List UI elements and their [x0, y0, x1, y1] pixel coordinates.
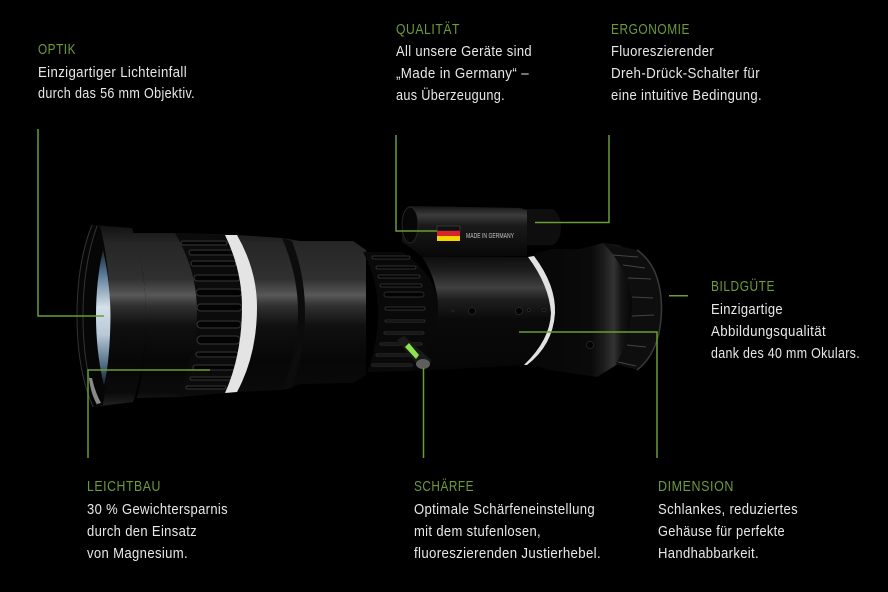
text block: leichtbau: durch den Einsatz: [87, 523, 197, 540]
text block: bildgüte: dank des 40 mm Okulars.: [711, 345, 860, 362]
main body: [410, 257, 553, 371]
device: night vision scope: [77, 206, 662, 407]
made in germany text: MADE IN GERMANY: [466, 231, 514, 240]
text block: leichtbau: 30 % Gewichtersparnis: [87, 501, 228, 518]
text block: ergonomie: Fluoreszierender: [611, 43, 714, 60]
body screw holes: [452, 308, 594, 348]
leader line: dimension: [519, 332, 657, 458]
rear ribbed ring: [363, 252, 438, 372]
text block: schärfe: SCHÄRFE: [414, 478, 474, 495]
text block: dimension: Handhabbarkeit.: [658, 545, 759, 562]
leader line: qualität: [396, 135, 437, 231]
text block: optik: Einzigartiger Lichteinfall: [38, 64, 187, 81]
leader line: schärfe: [422, 368, 424, 458]
white ring rear: [524, 256, 555, 365]
text block: ergonomie: Dreh-Drück-Schalter für: [611, 65, 760, 82]
text block: schärfe: fluoreszierenden Justierhebel.: [414, 545, 601, 562]
text block: qualität: All unsere Geräte sind: [396, 43, 532, 60]
text block: schärfe: mit dem stufenlosen,: [414, 523, 541, 540]
text block: bildgüte: Abbildungsqualität: [711, 323, 826, 340]
eyepiece ring: [603, 243, 662, 370]
text block: ergonomie: [611, 21, 762, 104]
text block: bildgüte: BILDGÜTE: [711, 277, 775, 295]
text block: qualität: [396, 21, 532, 104]
text block: dimension: Gehäuse für perfekte: [658, 523, 785, 540]
text block: leichtbau: [87, 478, 228, 562]
text block: schärfe: [414, 478, 601, 562]
text block: schärfe: Optimale Schärfeneinstellung: [414, 501, 595, 518]
text block: dimension: Schlankes, reduziertes: [658, 501, 798, 518]
leader line: leichtbau: [88, 370, 210, 458]
top unit: [402, 206, 561, 257]
text block: optik: OPTIK: [38, 41, 76, 58]
text block: dimension: [658, 478, 798, 562]
text block: leichtbau: von Magnesium.: [87, 545, 188, 562]
text block: optik: [38, 41, 195, 102]
text block: ergonomie: eine intuitive Bedingung.: [611, 87, 762, 104]
leader line: ergonomie: [535, 135, 609, 222]
rear section: [530, 243, 632, 377]
text block: qualität: „Made in Germany“ –: [396, 65, 529, 82]
white ring front: [225, 235, 257, 393]
text block: bildgüte: Einzigartige: [711, 301, 783, 318]
text block: optik: durch das 56 mm Objektiv.: [38, 85, 195, 102]
leader line: bildgüte: [669, 295, 688, 297]
text block: leichtbau: LEICHTBAU: [87, 478, 161, 495]
text block: qualität: aus Überzeugung.: [396, 86, 505, 104]
german flag: [437, 226, 460, 241]
front hood with lens: [77, 225, 146, 407]
text block: bildgüte: [711, 277, 860, 362]
grip ring with ribs: [175, 233, 243, 396]
leader line: optik: [38, 129, 104, 316]
front barrel: [133, 233, 366, 398]
barrel step shadow: [282, 238, 305, 390]
text block: dimension: DIMENSION: [658, 478, 734, 495]
green focus lever: [397, 336, 431, 369]
text block: qualität: QUALITÄT: [396, 21, 460, 38]
text block: ergonomie: ERGONOMIE: [611, 21, 690, 38]
